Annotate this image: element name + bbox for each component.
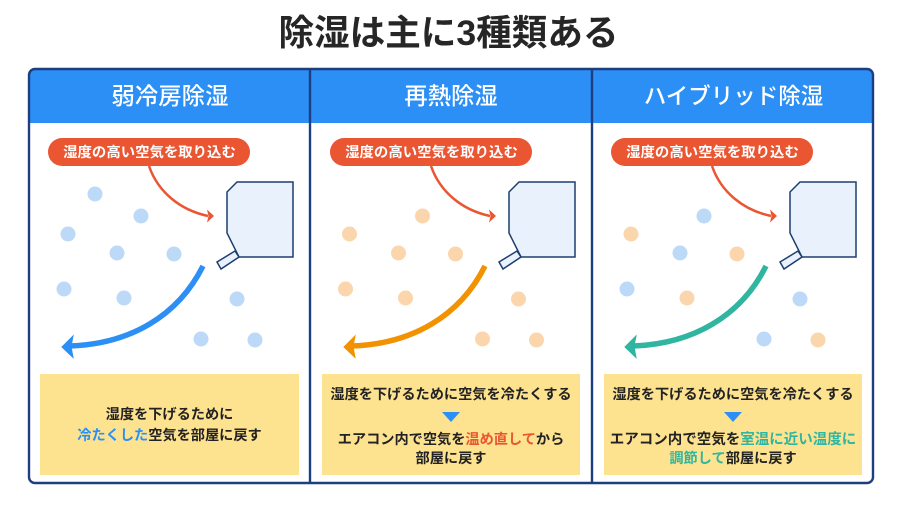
label pill: intake air	[48, 138, 250, 166]
title: 除湿は主に3種類ある	[278, 13, 618, 53]
icon: air conditioner	[499, 182, 575, 269]
humid air dots	[56, 186, 262, 348]
description box: 湿度を下げるために空気を冷たくする	[330, 386, 572, 403]
label pill: intake air	[611, 138, 813, 166]
panel: 弱冷房除湿	[40, 83, 299, 475]
arrow: intake air	[149, 166, 214, 222]
arrow: intake air	[431, 166, 496, 222]
heading: ハイブリッド除湿: ハイブリッド除湿	[644, 83, 823, 109]
heading: 再熱除湿: 再熱除湿	[404, 83, 498, 109]
comparison table frame	[29, 69, 873, 483]
arrow: room temperature air output	[625, 266, 766, 358]
description box: エアコン内で空気を室温に近い温度に	[610, 430, 856, 448]
description box	[322, 374, 580, 475]
label pill: intake air: 湿度の高い空気を取り込む	[63, 143, 236, 161]
description box	[40, 374, 299, 475]
mixed air dots	[620, 208, 826, 348]
description box: 冷たくした空気を部屋に戻す	[77, 427, 262, 444]
description box: 湿度を下げるために	[106, 407, 233, 423]
arrow: cooled air output	[62, 266, 203, 358]
arrow: reheated air output	[344, 266, 485, 358]
label pill: intake air: 湿度の高い空気を取り込む	[345, 143, 518, 161]
description box: エアコン内で空気を温め直してから	[338, 431, 564, 448]
icon: air conditioner	[780, 182, 856, 269]
description box: 部屋に戻す	[416, 451, 486, 467]
warm air dots	[338, 208, 544, 348]
icon: air conditioner	[217, 182, 293, 269]
description box: 湿度を下げるために空気を冷たくする	[612, 386, 854, 403]
label pill: intake air	[330, 138, 532, 166]
panel: 再熱除湿	[322, 83, 580, 475]
panel: ハイブリッド除湿	[604, 83, 862, 475]
arrow: intake air	[712, 166, 777, 222]
heading: 弱冷房除湿: 弱冷房除湿	[112, 83, 228, 109]
label pill: intake air: 湿度の高い空気を取り込む	[626, 143, 799, 161]
description box: 調節して部屋に戻す	[669, 450, 797, 467]
description box	[604, 374, 862, 475]
